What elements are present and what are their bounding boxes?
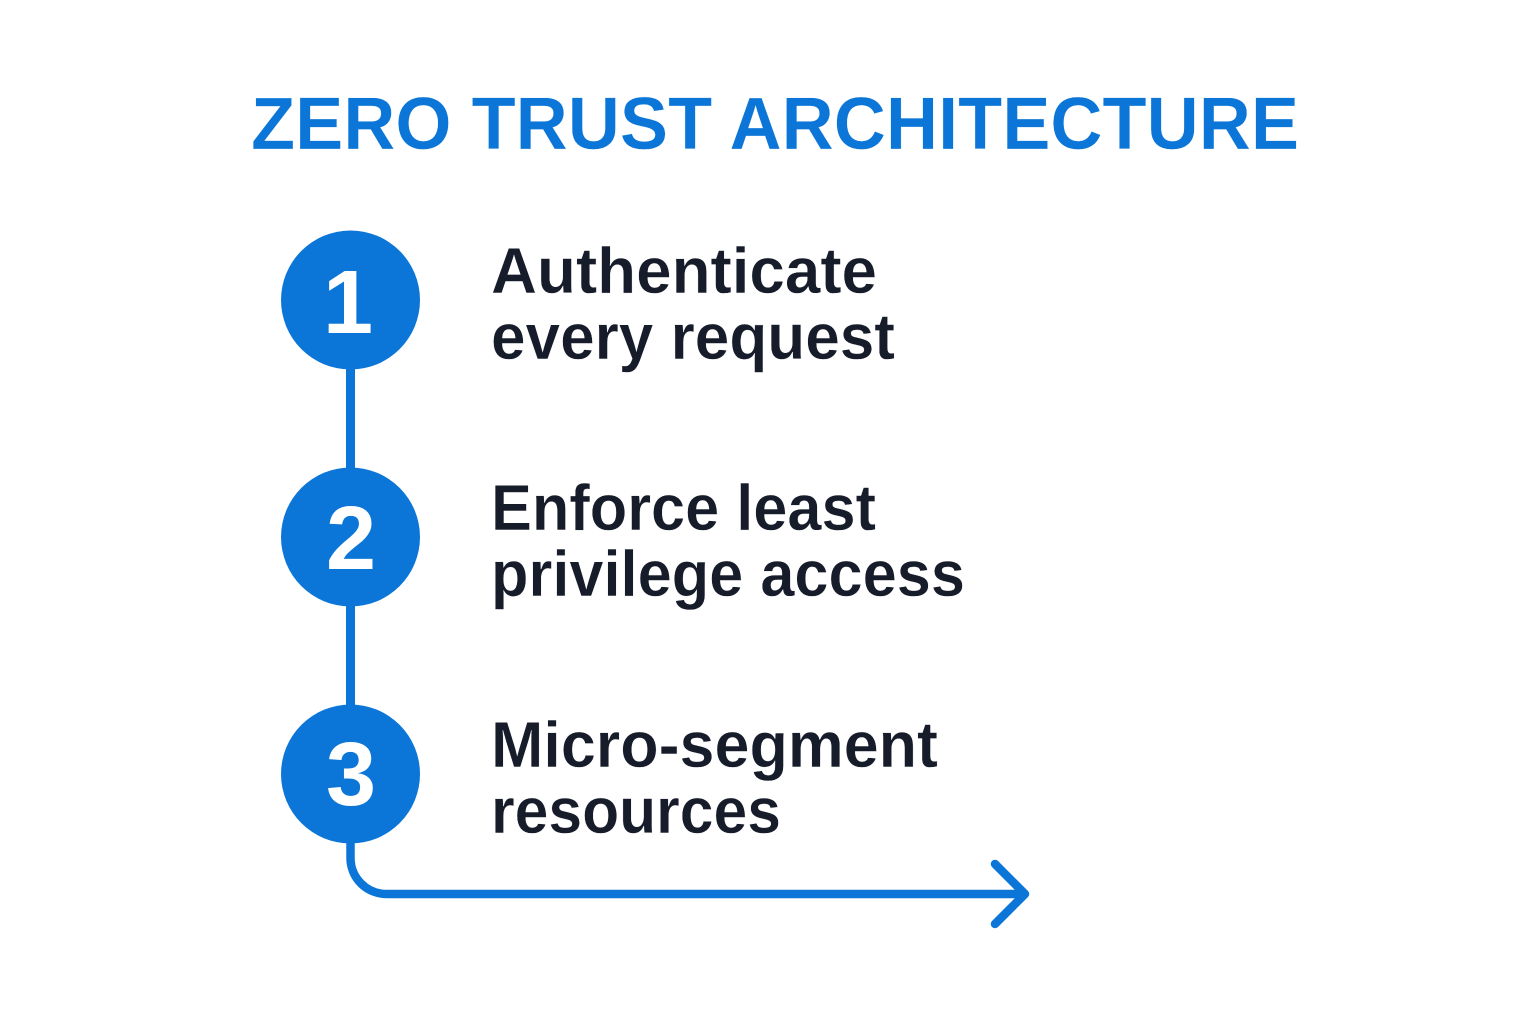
step 3 badge: 3 — [326, 725, 376, 825]
step 1 badge — [281, 230, 420, 370]
step 1 text — [491, 234, 895, 373]
title: ZERO TRUST ARCHITECTURE — [251, 82, 1299, 165]
step 2 badge — [281, 468, 420, 606]
connector: step 2 to step 3 — [346, 596, 355, 716]
step 3 badge — [281, 704, 420, 844]
step 1 text: every request — [491, 300, 895, 373]
connector: step 1 to step 2 — [346, 360, 355, 480]
step 2 badge: 2 — [326, 489, 376, 589]
step 3 text — [491, 708, 938, 847]
step 2 text: privilege access — [491, 537, 965, 610]
step 1 text: Authenticate — [491, 234, 877, 307]
step 1 badge: 1 — [323, 253, 373, 353]
arrow — [350, 842, 1025, 924]
step 3 text: resources — [491, 774, 781, 847]
step 2 text: Enforce least — [491, 471, 876, 544]
step 3 text: Micro-segment — [491, 708, 938, 781]
step 2 text — [491, 471, 965, 610]
